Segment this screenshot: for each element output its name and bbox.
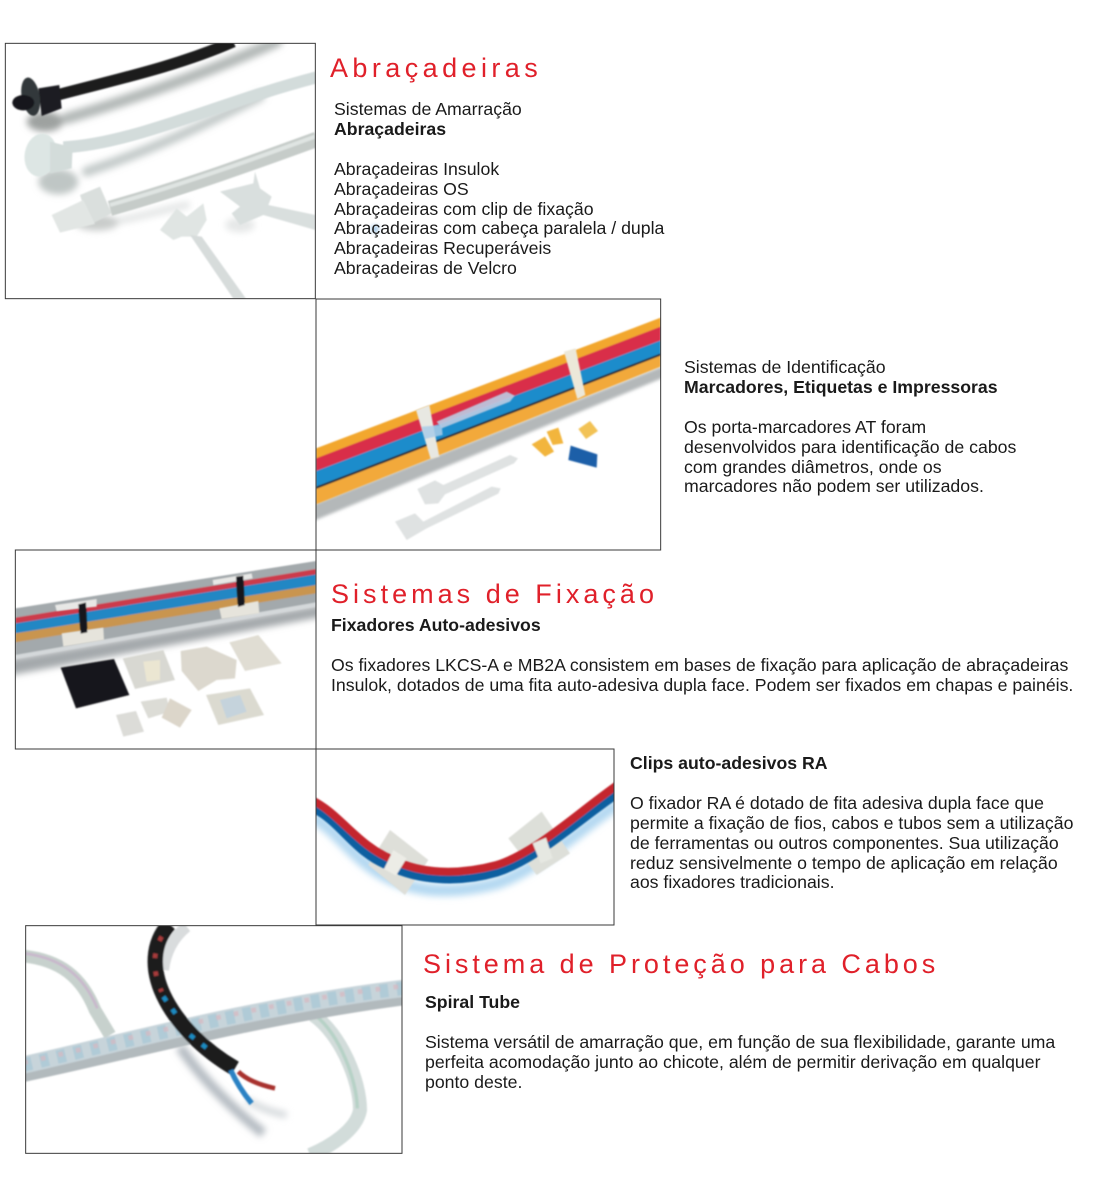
text: self-adhesive mounts: Fixadores Auto-adesivos <box>331 615 541 635</box>
text: identification systems: com grandes diâmetros, onde os <box>684 457 942 477</box>
text: identification systems: desenvolvidos para identificação de cabos <box>684 437 1016 457</box>
text: spiral tube: ponto deste. <box>425 1072 522 1092</box>
heading: Sistemas de Fixação: Sistemas de Fixação <box>331 579 658 609</box>
text: spiral tube: Sistema versátil de amarração que, em função de sua flexibilidade, garante uma <box>425 1032 1055 1052</box>
text: tie list: Abraçadeiras Recuperáveis <box>334 238 551 258</box>
text: tie list: Abraçadeiras de Velcro <box>334 258 517 278</box>
text: identification systems <box>684 357 1016 496</box>
heading: Sistema de Proteção para Cabos: Sistema de Proteção para Cabos <box>423 949 939 979</box>
text: tie list: Abraçadeiras com clip de fixação <box>334 199 594 219</box>
text: identification systems: Marcadores, Etiquetas e Impressoras <box>684 377 998 397</box>
text: RA clips: permite a fixação de fios, cabos e tubos sem a utilização <box>630 813 1073 833</box>
text: spiral tube <box>425 992 1056 1092</box>
text: RA clips: aos fixadores tradicionais. <box>630 872 834 892</box>
photo: red and blue wires in adhesive clips <box>312 749 618 925</box>
text: identification systems: Os porta-marcadores AT foram <box>684 417 926 437</box>
text: self-adhesive mounts <box>331 615 1073 695</box>
text: identification systems: Sistemas de Identificação <box>684 357 886 377</box>
text: RA clips: reduz sensivelmente o tempo de aplicação em relação <box>630 853 1058 873</box>
text: RA clips <box>630 753 1073 892</box>
text: tie list: Abraçadeiras Insulok <box>334 159 499 179</box>
text: RA clips: Clips auto-adesivos RA <box>630 753 828 773</box>
text: self-adhesive mounts: Insulok, dotados de uma fita auto-adesiva dupla face. Podem ser fixados em chapas e painéis. <box>331 675 1073 695</box>
text: tie list: Sistemas de Amarração <box>334 99 522 119</box>
text: spiral tube: perfeita acomodação junto ao chicote, além de permitir derivação em qualquer <box>425 1052 1040 1072</box>
text: tie list: Abraçadeiras com cabeça paralela / dupla <box>334 218 664 238</box>
text: spiral tube: Spiral Tube <box>425 992 520 1012</box>
text: self-adhesive mounts: Os fixadores LKCS-A e MB2A consistem em bases de fixação para aplicação de abraçadeiras <box>331 655 1068 675</box>
photo: rail with self-adhesive mounts <box>3 550 323 749</box>
photo: cable ties with fixing clips <box>5 42 317 299</box>
text: identification systems: marcadores não podem ser utilizados. <box>684 476 984 496</box>
text: RA clips: de ferramentas ou outros componentes. Sua utilização <box>630 833 1059 853</box>
text: tie list: Abraçadeiras <box>334 119 446 139</box>
text: tie list: Abraçadeiras OS <box>334 179 469 199</box>
heading: Abraçadeiras: Abraçadeiras <box>330 53 542 83</box>
text: RA clips: O fixador RA é dotado de fita adesiva dupla face que <box>630 793 1044 813</box>
text: tie list <box>334 99 664 278</box>
photo: spiral tube protecting wires <box>23 924 403 1155</box>
photo: cable bundle with marker holders <box>303 299 670 550</box>
photo panels <box>4 42 662 1154</box>
